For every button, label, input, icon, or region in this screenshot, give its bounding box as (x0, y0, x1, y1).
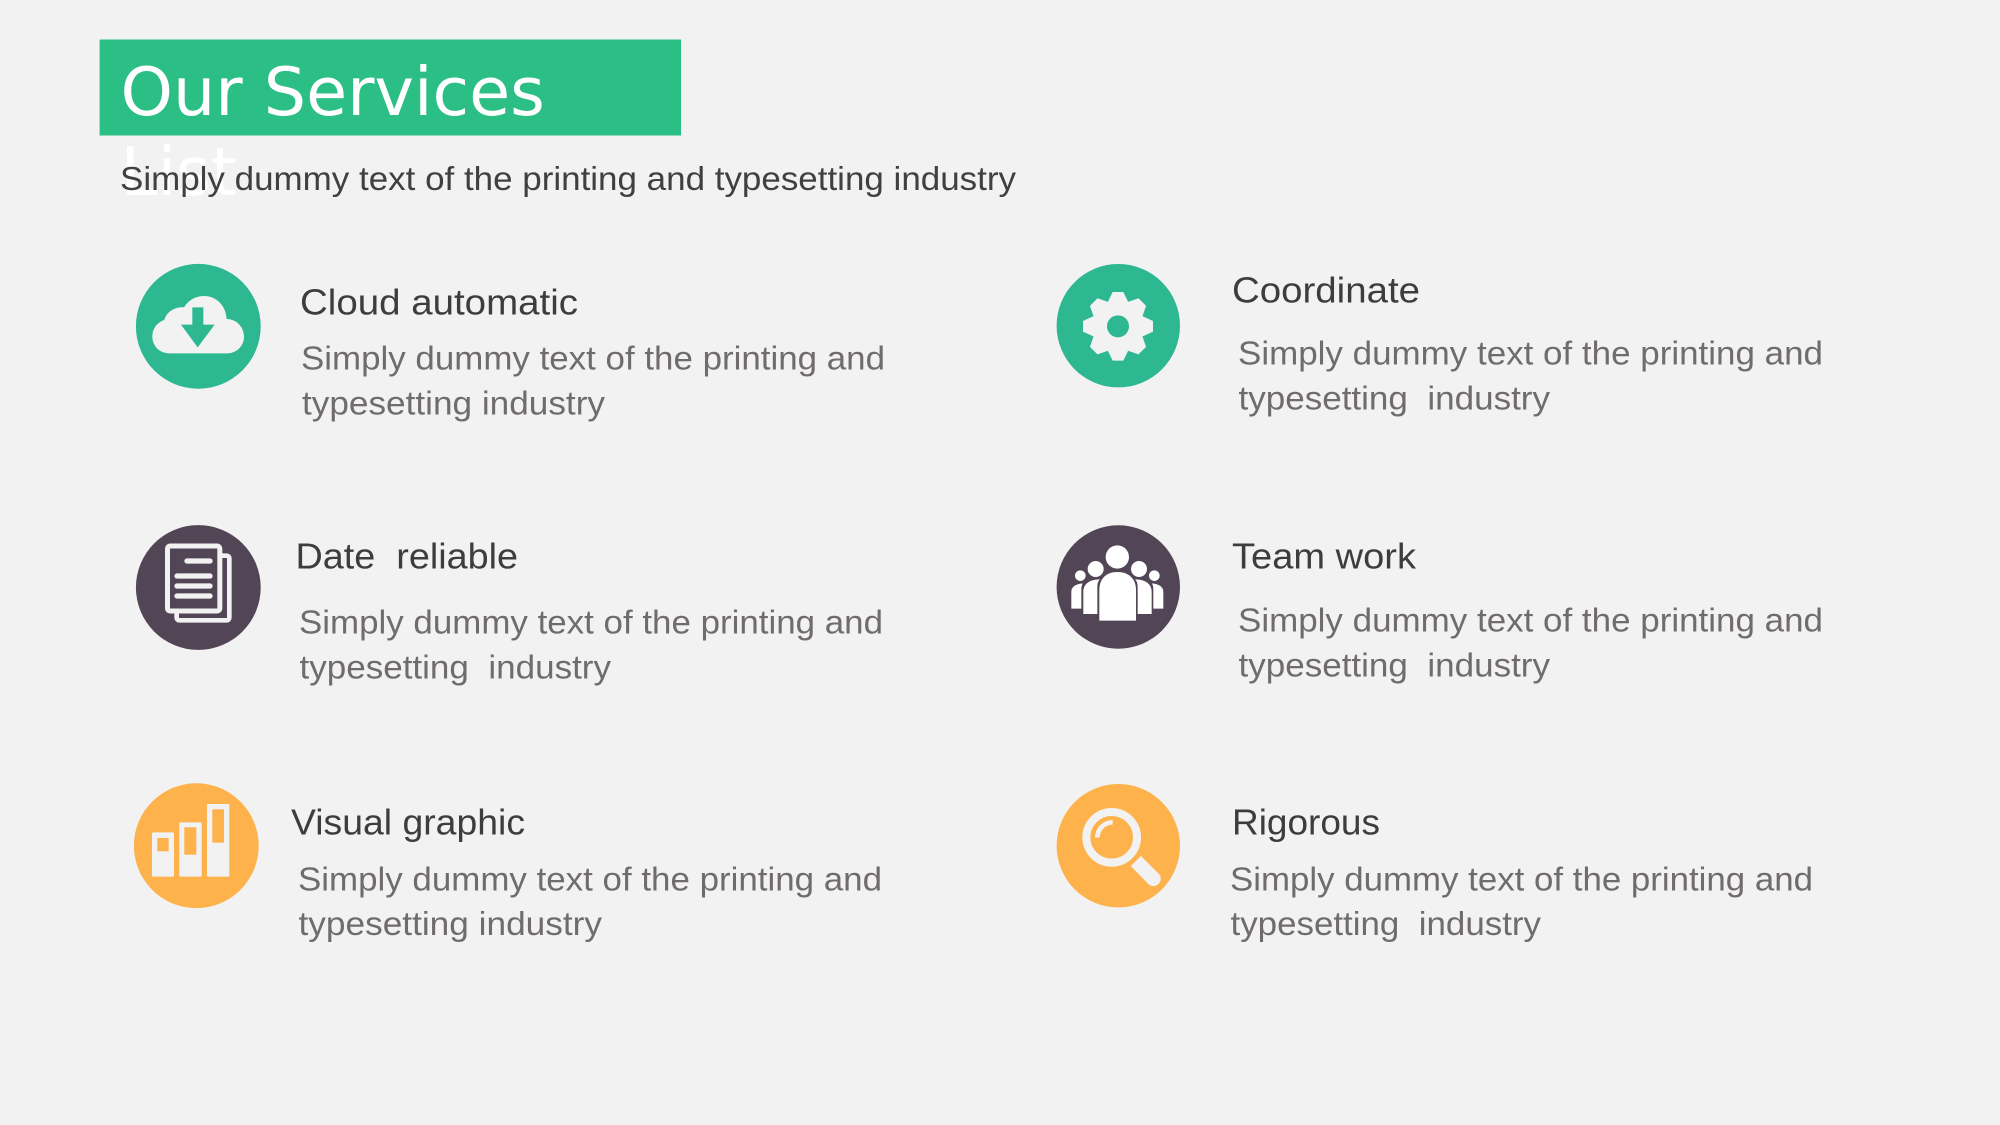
description: typesetting industry (1230, 905, 1542, 942)
icon: gear (1057, 264, 1180, 387)
heading: Rigorous (1232, 801, 1380, 842)
description: Simply dummy text of the printing and (1238, 602, 1823, 639)
description (1238, 602, 1823, 684)
panel: cloud automatic (136, 264, 885, 422)
icon: magnifier (1057, 784, 1180, 907)
panel: date reliable (136, 525, 883, 685)
heading: Visual graphic (291, 801, 525, 842)
title (100, 40, 681, 211)
description: typesetting industry (1238, 647, 1551, 684)
description (1238, 334, 1823, 416)
panel: rigorous (1057, 784, 1813, 942)
panel: coordinate (1057, 264, 1823, 416)
description (299, 603, 883, 685)
panel: team work (1057, 525, 1823, 684)
panel: visual graphic (134, 783, 882, 942)
description: Simply dummy text of the printing and (299, 603, 883, 640)
description: typesetting industry (1238, 379, 1551, 416)
heading: Date reliable (296, 535, 518, 576)
icon: team (1057, 525, 1180, 649)
description: typesetting industry (300, 648, 612, 685)
description (301, 340, 885, 422)
description (298, 860, 882, 942)
description (1230, 860, 1813, 942)
heading: Team work (1232, 535, 1417, 576)
description: Simply dummy text of the printing and (1238, 334, 1823, 371)
title: Our Services (120, 53, 545, 131)
description: typesetting industry (302, 384, 606, 422)
heading: Coordinate (1232, 269, 1420, 310)
description: Simply dummy text of the printing and (298, 860, 882, 898)
icon: bar chart (134, 783, 259, 908)
title: List (120, 133, 237, 211)
description: Simply dummy text of the printing and (1230, 860, 1813, 898)
description: Simply dummy text of the printing and (301, 340, 885, 376)
icon: cloud download (136, 264, 261, 389)
description: typesetting industry (298, 905, 603, 942)
icon: documents (136, 525, 261, 650)
subtitle: Simply dummy text of the printing and typesetting industry (120, 160, 1017, 197)
heading: Cloud automatic (300, 281, 578, 322)
